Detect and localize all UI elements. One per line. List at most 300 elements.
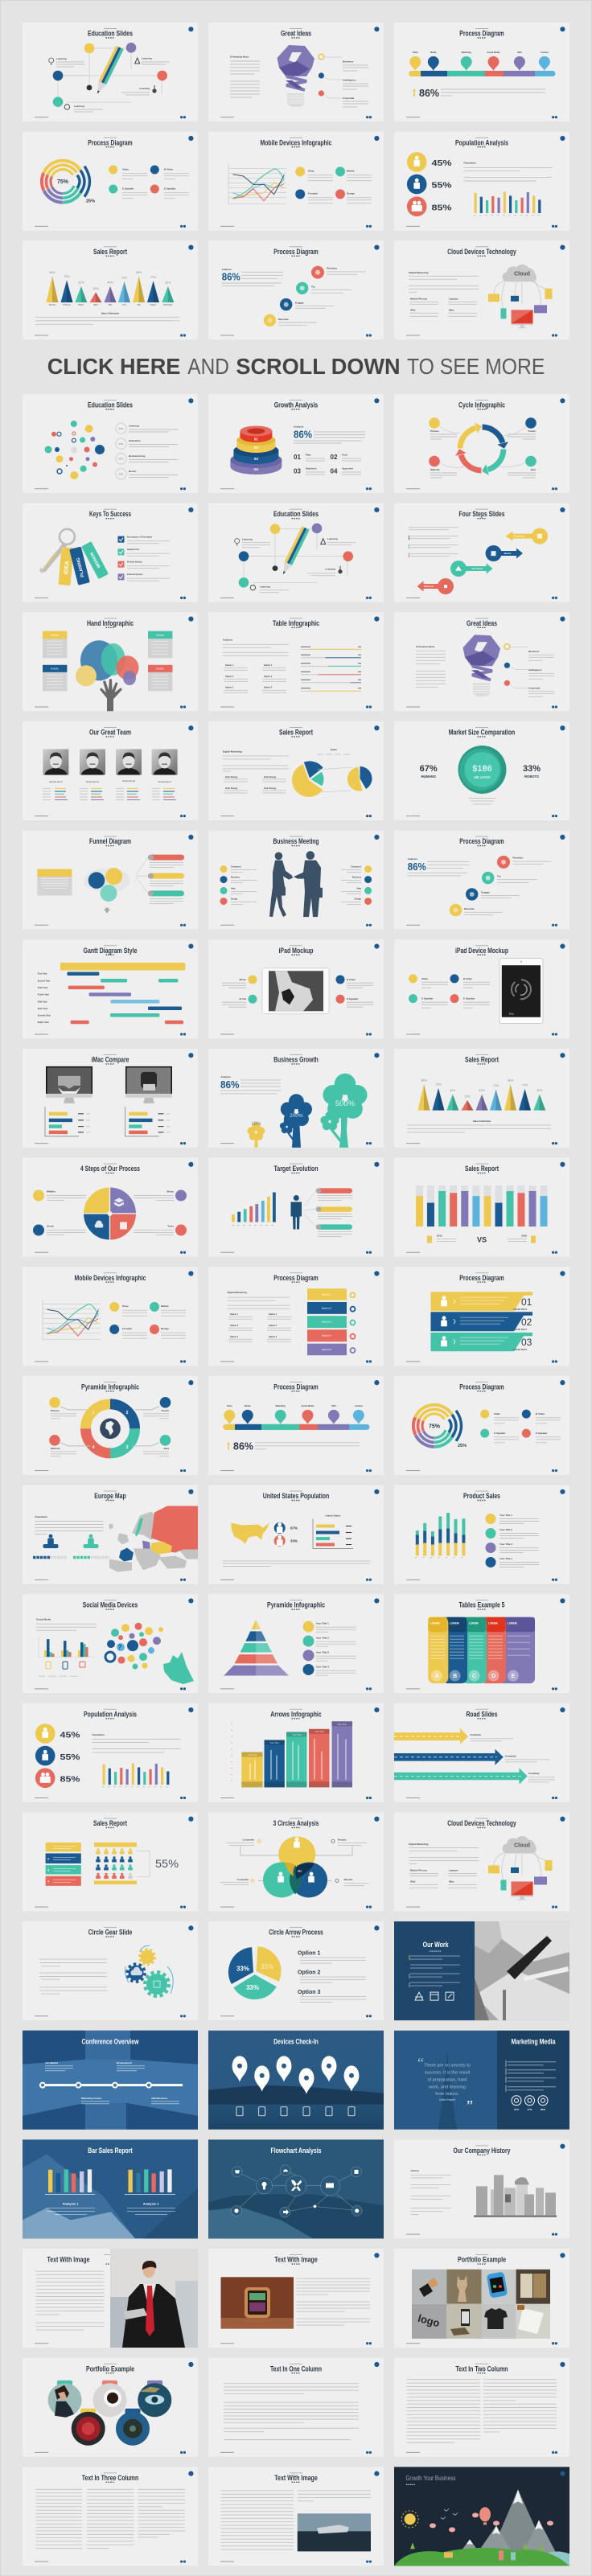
heading: Text With Image bbox=[274, 2256, 318, 2264]
values: 40% bbox=[107, 281, 113, 284]
text: analysis and options: Option 4 bbox=[264, 664, 273, 667]
labels: Prioritize bbox=[512, 857, 524, 860]
heading: Process Diagram bbox=[459, 1274, 504, 1282]
text block bbox=[35, 1515, 103, 1535]
background: architecture bbox=[23, 2031, 198, 2130]
month labels: September bbox=[163, 303, 173, 306]
labels: Cloud bbox=[514, 271, 530, 277]
gantt header bbox=[60, 963, 185, 971]
column letters: A bbox=[434, 1674, 439, 1679]
labels: Website bbox=[430, 468, 440, 471]
text list bbox=[409, 528, 458, 558]
subheading: Sales Definition bbox=[101, 311, 119, 314]
heading: Keys To Success bbox=[89, 510, 131, 518]
panel: Text With Image man bbox=[23, 2249, 198, 2348]
labels: Mobile Phones bbox=[410, 297, 428, 300]
arrow labels: Get Cloud bbox=[471, 567, 483, 570]
ring stats bbox=[512, 2096, 548, 2111]
heading: Process Diagram bbox=[273, 1274, 319, 1282]
panel: Market Size Comparation bbox=[394, 721, 569, 820]
column titles: Your Text bbox=[248, 1753, 257, 1756]
text block: Option 6 bbox=[269, 1336, 278, 1338]
option banners bbox=[307, 1288, 347, 1355]
column letters bbox=[431, 1670, 519, 1682]
diagram: funnel circles bbox=[84, 857, 148, 914]
icon: sun bbox=[401, 2511, 418, 2528]
stat: 86%: 86% bbox=[408, 861, 426, 873]
labels: 8 Amazing Ideas bbox=[416, 645, 435, 648]
heading: Gantt Diagram Style bbox=[84, 947, 138, 955]
labels bbox=[222, 266, 338, 321]
stats: 85% bbox=[60, 1776, 80, 1785]
options: Option 1 bbox=[298, 1951, 320, 1957]
illustration: teal tree bbox=[320, 1074, 368, 1148]
venn icons bbox=[278, 1838, 314, 1882]
text column 2 bbox=[483, 2380, 557, 2432]
event tables: Events bbox=[156, 634, 164, 637]
ring stats: 86% bbox=[541, 2108, 545, 2111]
chart: line graph bbox=[228, 164, 372, 204]
heading: Text In One Column bbox=[270, 2364, 322, 2373]
labels: Learning bbox=[242, 538, 253, 541]
analysis captions: Analysis 2 bbox=[143, 2201, 159, 2205]
banner: click here: SCROLL DOWN bbox=[236, 354, 401, 379]
list: Your Title 1 bbox=[500, 1514, 512, 1517]
subheading: Sales Definition bbox=[473, 1120, 491, 1123]
labels: 75% bbox=[429, 1424, 441, 1429]
arrow labels: Delicious bbox=[424, 585, 434, 588]
feature list: Video bbox=[421, 977, 428, 980]
panel: Funnel Diagram bbox=[23, 831, 198, 930]
stats bbox=[431, 159, 476, 212]
labels: iMac bbox=[449, 1880, 454, 1883]
map of USA bbox=[231, 1523, 269, 1544]
band 01: YOUR TEXT bbox=[513, 1308, 527, 1311]
feature list: E Speaker bbox=[463, 996, 475, 1000]
analysis text: 86% bbox=[294, 428, 312, 441]
values: 25% bbox=[92, 287, 99, 290]
quote: Colin Powell bbox=[439, 2098, 455, 2101]
panel: Process Diagram donut bbox=[23, 132, 198, 231]
panel: Sales Report pies bbox=[208, 721, 384, 820]
pin labels: Video bbox=[227, 1404, 232, 1407]
month labels: May bbox=[109, 304, 113, 306]
photo oval: woman with cup bbox=[48, 2381, 82, 2418]
background: mountains bbox=[23, 2139, 198, 2238]
heading: Devices Check-In bbox=[273, 2037, 319, 2045]
panel: Hand Infographic bbox=[23, 612, 198, 711]
text column 1 bbox=[407, 2380, 480, 2442]
labels: Analysis bbox=[222, 268, 232, 271]
labels: Corporate bbox=[528, 686, 541, 689]
labels bbox=[409, 271, 530, 311]
stats: HUMANS bbox=[421, 774, 436, 779]
text block: Solar Energy bbox=[264, 787, 277, 790]
banner: click here: AND bbox=[187, 354, 229, 379]
text block bbox=[411, 2169, 451, 2214]
pin labels: Marketing bbox=[462, 51, 471, 54]
comparison bars left bbox=[45, 1107, 90, 1136]
chart: rising bars bbox=[232, 1193, 276, 1226]
panel: Road Slides bbox=[394, 1703, 569, 1802]
event tables bbox=[43, 631, 172, 691]
month labels: January bbox=[49, 304, 56, 306]
right icons bbox=[364, 865, 372, 905]
chart: pin timeline bar bbox=[409, 56, 555, 97]
band 01: 01 bbox=[521, 1296, 532, 1308]
text: analysis and options: Option 6 bbox=[264, 686, 273, 688]
column titles: Your Text bbox=[292, 1733, 302, 1736]
illustration: handshake silhouettes bbox=[269, 851, 323, 917]
ring numbers bbox=[92, 1411, 129, 1450]
people grid bbox=[94, 1843, 137, 1884]
chart: venn diagram bbox=[263, 1836, 327, 1897]
labels: Trends bbox=[528, 429, 536, 433]
labels: Learning bbox=[327, 537, 338, 540]
column headers: LOREM bbox=[488, 1622, 498, 1625]
list text: 25% bbox=[118, 457, 124, 460]
heading: iMac Compare bbox=[92, 1056, 130, 1064]
photo tile: cards bbox=[412, 2270, 446, 2304]
diagram: stepped circles bbox=[222, 266, 365, 327]
column titles: Your Text bbox=[337, 1723, 347, 1726]
band 03: 03 bbox=[521, 1337, 532, 1348]
text column short bbox=[298, 2491, 371, 2501]
panel: Portfolio Example grid bbox=[394, 2249, 569, 2348]
panel: Cloud Devices Technology copy bbox=[394, 1812, 569, 1911]
options bbox=[298, 1951, 366, 2003]
list description lines bbox=[129, 429, 178, 478]
band 02 bbox=[431, 1312, 532, 1331]
panel: Cycle Infographic bbox=[394, 394, 569, 493]
text block: Solar Energy bbox=[225, 787, 238, 790]
values bbox=[421, 1078, 543, 1098]
ring numbers: 04 bbox=[254, 467, 258, 471]
column headers: LOREM bbox=[508, 1622, 517, 1625]
list: percent rings bbox=[116, 423, 126, 479]
labels: Shop bbox=[122, 1304, 129, 1308]
panel: Table Infographic bbox=[208, 612, 384, 711]
photo: desk with ruler bbox=[394, 1921, 569, 2020]
stat: 86%: 86% bbox=[222, 271, 240, 283]
column letters: C bbox=[472, 1674, 476, 1679]
gender circles bbox=[274, 1522, 298, 1547]
labels: Prioritize bbox=[327, 266, 338, 269]
tree values: 200% bbox=[290, 1113, 303, 1119]
diagram: stacked rings bbox=[230, 426, 282, 475]
pin labels: Content bbox=[355, 1404, 363, 1407]
left icons: Business bbox=[352, 877, 362, 879]
photo: businessman bbox=[110, 2249, 198, 2348]
labels bbox=[429, 1412, 548, 1448]
pin labels bbox=[413, 51, 549, 54]
device mockup with photo bbox=[262, 968, 329, 1014]
labels bbox=[56, 56, 152, 108]
pin labels: Social Media bbox=[487, 51, 500, 54]
chart: market circle: $186 bbox=[472, 764, 492, 774]
chart legend bbox=[317, 748, 351, 754]
monitors bbox=[46, 1066, 172, 1103]
labels: Engage bbox=[295, 301, 304, 304]
values: 72% bbox=[493, 1084, 500, 1087]
panel: Sales Report bars VS bbox=[394, 1158, 569, 1257]
text block bbox=[35, 2271, 104, 2330]
stats: Population bbox=[463, 162, 476, 165]
labels: Laptops bbox=[449, 297, 458, 300]
illustration: birds, balloon and clouds bbox=[430, 2507, 553, 2532]
skill bars bbox=[43, 788, 176, 800]
heading: Business Growth bbox=[273, 1056, 319, 1064]
chart legend: Sales bbox=[331, 748, 337, 751]
heading: United States Population bbox=[263, 1492, 329, 1500]
stats: 33% bbox=[523, 764, 541, 774]
road notes: Creativity bbox=[505, 1754, 516, 1757]
banner: click here: CLICK HERE bbox=[47, 354, 180, 379]
bar chart 2 bbox=[125, 2169, 175, 2194]
diagram: stepped circles bbox=[408, 856, 551, 916]
labels bbox=[230, 55, 356, 100]
list: Your Title 2 bbox=[316, 1637, 329, 1640]
chart: tall bars bbox=[416, 1185, 547, 1226]
text block bbox=[227, 1291, 291, 1341]
road notes: Creativity bbox=[528, 1772, 540, 1775]
stats: 67% bbox=[420, 764, 438, 774]
timeline notes bbox=[45, 2061, 179, 2104]
panel: Business Growth bbox=[208, 1049, 384, 1148]
list bbox=[506, 2060, 556, 2092]
band 03 bbox=[431, 1333, 532, 1351]
chart: market circle: MILLIONS bbox=[474, 775, 491, 779]
heading: Europe Map bbox=[94, 1492, 126, 1500]
diagram: cycle arrows bbox=[455, 422, 508, 475]
photo tile: brochures bbox=[516, 2270, 550, 2304]
labels: Corporate bbox=[343, 97, 355, 100]
row labels bbox=[38, 973, 51, 1024]
values: 32% bbox=[450, 1089, 456, 1092]
heading: Education Slides bbox=[88, 401, 133, 409]
diagram: cloud with devices bbox=[409, 1836, 552, 1900]
text list bbox=[409, 1951, 460, 1987]
heading: Growth Analysis bbox=[274, 401, 318, 409]
feature list: S Speaker bbox=[421, 996, 434, 1000]
labels: Formula bbox=[308, 192, 318, 195]
diagram: ribbon light bulb bbox=[230, 45, 368, 107]
panel: Growth Analysis bbox=[208, 394, 384, 493]
chart: segmented donut bbox=[406, 1398, 561, 1453]
list text: 25% bbox=[118, 427, 124, 430]
checklist: Key aspects of the market bbox=[127, 536, 152, 539]
heading bbox=[405, 2471, 565, 2484]
illustration: hand with bubbles bbox=[76, 640, 138, 711]
list text: Education bbox=[129, 439, 141, 442]
analysis text: Goal bbox=[342, 454, 347, 457]
stats: ROBOTS bbox=[524, 774, 539, 779]
chart: arrow ring bbox=[85, 1404, 135, 1453]
stat: 55%: 55% bbox=[155, 1857, 179, 1870]
heading: Mobile Devices Infographic bbox=[261, 138, 332, 146]
heading: Hand Infographic bbox=[87, 619, 134, 627]
bar chart 1 bbox=[45, 2169, 95, 2194]
labels: Learning bbox=[139, 87, 150, 90]
row labels: First Task bbox=[38, 973, 47, 976]
corner callouts: Website bbox=[51, 1447, 60, 1450]
map pins bbox=[232, 2056, 359, 2094]
labels: Learning bbox=[325, 568, 335, 571]
ring numbers: 3 bbox=[126, 1445, 129, 1450]
labels: 25% bbox=[458, 1444, 467, 1448]
panel: Great Ideas bbox=[208, 23, 384, 121]
left icons: Design bbox=[231, 898, 238, 901]
left icons: Commerce bbox=[351, 866, 362, 869]
labels: iPad bbox=[410, 1880, 416, 1883]
photo oval: tiny planet bbox=[116, 2409, 150, 2446]
labels: B Video bbox=[536, 1412, 545, 1415]
values: 72% bbox=[121, 276, 128, 279]
month labels: June bbox=[122, 304, 127, 306]
panel: Text With Image landscape bbox=[208, 2467, 384, 2566]
analysis text bbox=[294, 425, 365, 475]
panel: Our Company History bbox=[394, 2139, 569, 2238]
text block: Option 2 bbox=[269, 1313, 278, 1316]
table columns bbox=[428, 1617, 535, 1683]
labels: Results bbox=[344, 1878, 353, 1881]
tree values bbox=[251, 1099, 356, 1127]
option banners: Option 2 bbox=[322, 1307, 331, 1310]
labels: Laptops bbox=[449, 1868, 458, 1871]
stats: 45% bbox=[431, 159, 452, 168]
text column 1 bbox=[35, 2489, 82, 2548]
tablet device bbox=[500, 959, 543, 1024]
pin labels: Media bbox=[430, 51, 437, 54]
text box bbox=[37, 869, 72, 896]
chart: thin progress lines bbox=[301, 647, 361, 691]
heading: 4 Steps of Our Process bbox=[80, 1165, 140, 1173]
heading: Pyramide Infographic bbox=[267, 1601, 325, 1609]
text block: History bbox=[411, 2169, 419, 2172]
heading: Growth Your Business bbox=[405, 2475, 455, 2482]
left icons bbox=[220, 865, 362, 905]
illustration: bunch of keys: MISSION bbox=[89, 551, 101, 569]
labels: Phones bbox=[430, 429, 439, 433]
labels: Shop bbox=[308, 170, 314, 173]
column headers: LOREM bbox=[430, 1622, 440, 1625]
text block: Digital Marketing bbox=[223, 750, 242, 753]
corner callouts bbox=[49, 1397, 171, 1456]
illustration: bunch of keys: SUCCESS bbox=[43, 551, 59, 569]
diagram: pencil with circles bbox=[235, 524, 356, 593]
feature list: B Video bbox=[463, 977, 472, 980]
labels bbox=[220, 1838, 369, 1885]
photo: plane wreck on beach bbox=[298, 2513, 371, 2551]
text block: Option 1 bbox=[230, 1313, 239, 1316]
illustration: gray city bbox=[474, 2175, 557, 2217]
tablet device: Edu bbox=[509, 1012, 514, 1015]
side icons bbox=[33, 1190, 187, 1236]
list: Your Title 1 bbox=[316, 1622, 329, 1625]
heading: Business Meeting bbox=[273, 837, 319, 845]
panel: Circle Gear Slide bbox=[23, 1921, 198, 2020]
ring numbers: 02 bbox=[254, 446, 258, 450]
panel: Keys To Success bbox=[23, 503, 198, 602]
labels: Cloud bbox=[514, 1843, 530, 1848]
column titles bbox=[248, 1723, 347, 1756]
column titles: Your Text bbox=[269, 1741, 279, 1744]
tree values: 18% bbox=[251, 1122, 261, 1127]
timeline notes: Job Market bbox=[45, 2061, 58, 2064]
quote: There are no secrets to bbox=[424, 2063, 471, 2068]
numbered list: 4 bbox=[47, 1879, 50, 1883]
analysis text: Objective bbox=[306, 466, 317, 470]
option banners: Option 1 bbox=[322, 1293, 331, 1296]
values bbox=[49, 271, 171, 290]
panel: Process Diagram pins bbox=[394, 23, 569, 121]
panel: Text In Two Column bbox=[394, 2358, 569, 2457]
analysis captions bbox=[47, 2201, 175, 2214]
quote bbox=[417, 2055, 473, 2114]
stats bbox=[60, 1731, 105, 1785]
panel: Population Analysis copy bbox=[23, 1703, 198, 1802]
labels: Design bbox=[347, 192, 355, 195]
heading: Conference Overview bbox=[82, 2037, 139, 2045]
stats: Population bbox=[92, 1733, 105, 1736]
caption lines bbox=[468, 798, 496, 804]
text: analysis and options: Option 3 bbox=[225, 686, 234, 688]
column titles: Your Text bbox=[314, 1730, 324, 1733]
axis labels bbox=[231, 1723, 232, 1782]
panel: Four Steps Slides bbox=[394, 503, 569, 602]
road notes bbox=[470, 1733, 555, 1782]
labels bbox=[242, 537, 338, 589]
month labels: July bbox=[137, 304, 142, 306]
text block: Solar Energy bbox=[225, 776, 238, 779]
list text: 25% bbox=[118, 442, 124, 446]
values: 23% bbox=[464, 1095, 471, 1098]
pills bbox=[148, 855, 184, 904]
labels: Business bbox=[528, 650, 540, 653]
labels: 25% bbox=[86, 199, 95, 204]
timeline bbox=[39, 2082, 183, 2089]
column letters: E bbox=[512, 1674, 516, 1679]
heading: Marketing Media bbox=[512, 2037, 556, 2045]
photo tile: stationery bbox=[516, 2304, 550, 2339]
ring numbers: 2 bbox=[126, 1411, 129, 1415]
heading: Sales Report bbox=[279, 729, 313, 737]
panel: Conference Overview bbox=[23, 2031, 198, 2130]
arrow labels: Books bbox=[504, 552, 512, 555]
connectors bbox=[240, 1846, 352, 1880]
chart: columns bbox=[241, 1721, 352, 1787]
arrow labels: Download bbox=[513, 535, 524, 538]
labels: Digital Marketing bbox=[409, 1843, 429, 1846]
text: analysis and options bbox=[223, 638, 289, 692]
text block: Social Media bbox=[36, 1618, 51, 1621]
chart: triangles bbox=[407, 1084, 551, 1132]
panel: Text With Image bookshelf bbox=[208, 2249, 384, 2348]
column letters: B bbox=[453, 1674, 457, 1679]
corner callouts: Java bbox=[163, 1447, 169, 1450]
stat: 86%: 86% bbox=[233, 1440, 253, 1452]
side icons: B Life bbox=[240, 997, 246, 1000]
heading: iPad Device Mockup bbox=[455, 947, 508, 955]
ring stats: 37% bbox=[514, 2108, 519, 2111]
chart: segmented donut bbox=[35, 154, 189, 209]
pie labels: 33% bbox=[246, 1984, 259, 1991]
map of Europe bbox=[109, 1506, 198, 1571]
corner callouts: Trends bbox=[161, 1409, 169, 1412]
values: 32% bbox=[165, 281, 171, 284]
band 03: YOUR TEXT bbox=[513, 1348, 527, 1351]
tree values: 500% bbox=[335, 1099, 356, 1108]
